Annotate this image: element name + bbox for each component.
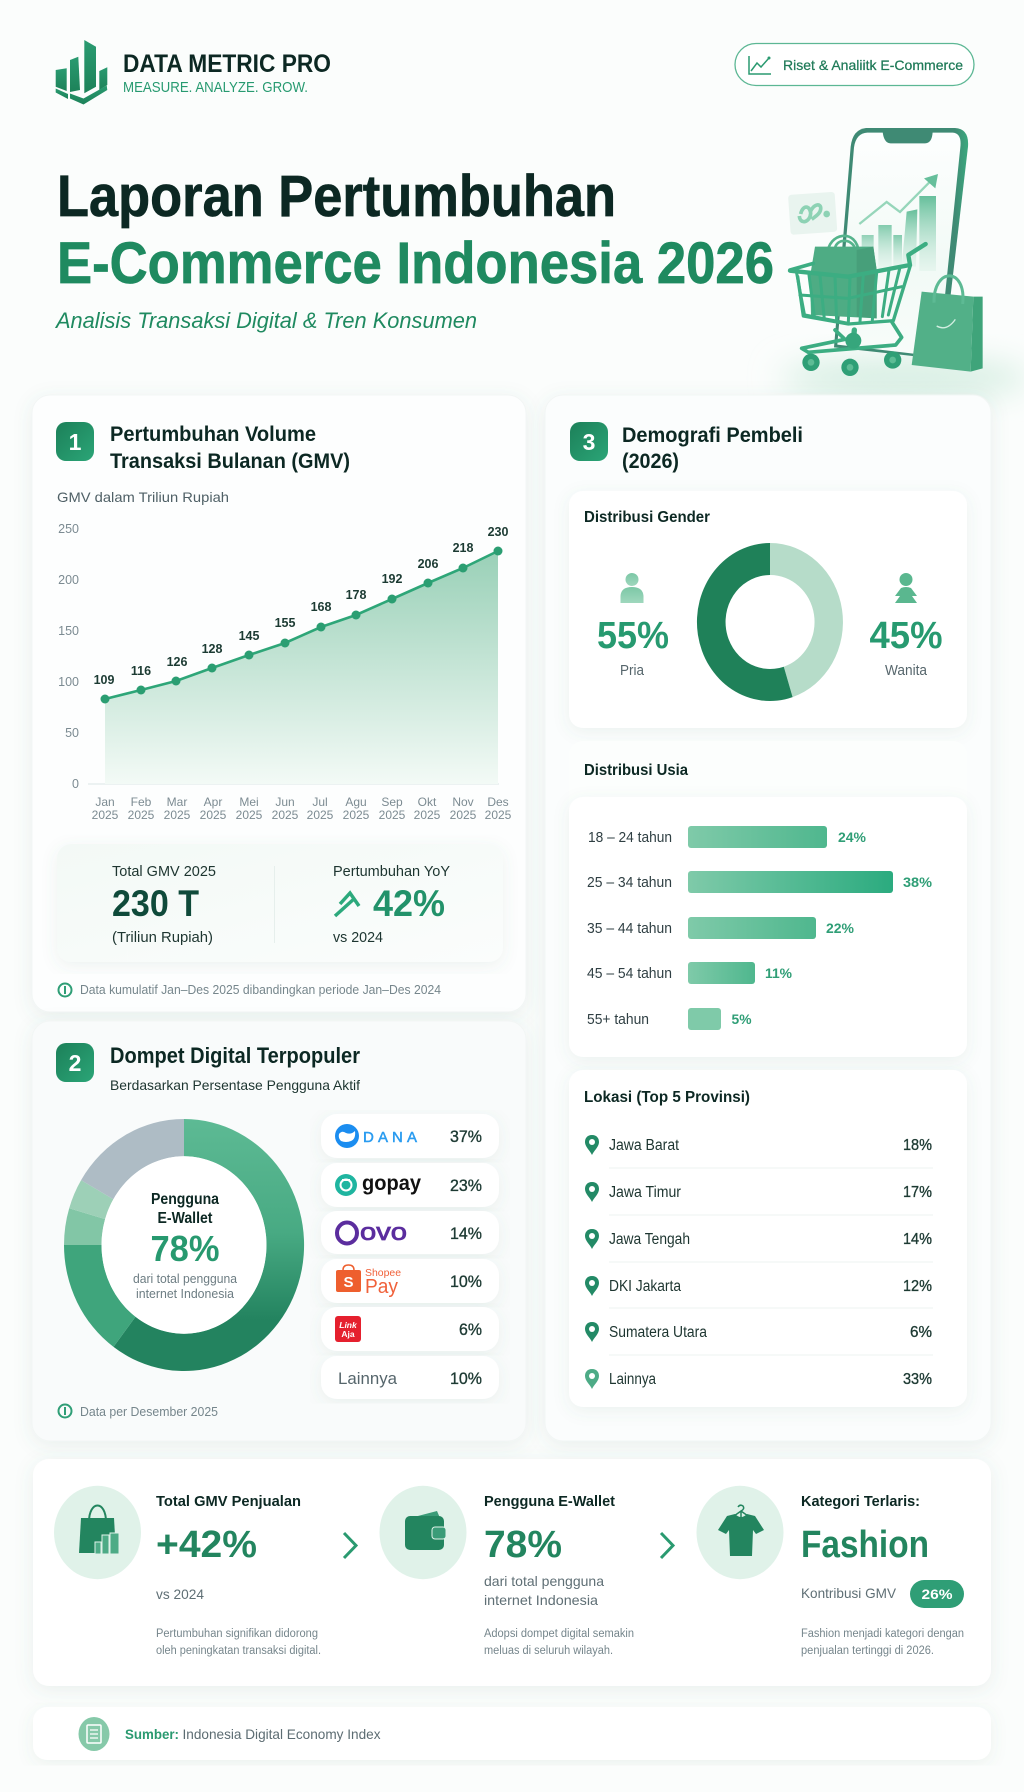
- contribution badge: 26%: [922, 1586, 953, 1602]
- header pill: research label: [735, 44, 974, 86]
- takeaway 3: top category: Fashion: [801, 1524, 929, 1566]
- takeaway 2: e-wallet users: [380, 1486, 634, 1657]
- female share: [870, 615, 942, 679]
- area chart: monthly GMV: 100: [58, 675, 79, 689]
- subtitle: Analisis Transaksi Digital & Tren Konsumen: [54, 308, 477, 333]
- takeaway 3: top category: penjualan tertinggi di 2026.: [801, 1645, 934, 1657]
- illustration: phone and shopping cart: [788, 128, 983, 376]
- row: Jawa Barat: Jawa Barat: [609, 1137, 680, 1154]
- chart subtitle: GMV dalam Triliun Rupiah: [57, 489, 229, 505]
- takeaway 1: total GMV: Total GMV Penjualan: [156, 1493, 301, 1510]
- takeaway 1: total GMV: +42%: [156, 1524, 257, 1566]
- takeaway 1: total GMV: vs 2024: [156, 1586, 204, 1602]
- area chart: monthly GMV: 126: [167, 655, 187, 669]
- bar chart: age groups: 38%: [903, 874, 933, 890]
- area chart: monthly GMV: 0: [72, 777, 79, 791]
- panel heading: [110, 423, 350, 473]
- area chart: monthly GMV: Jun: [275, 795, 295, 809]
- panel heading: Pertumbuhan Volume: [110, 423, 316, 446]
- source bar: Sumber:: [125, 1726, 179, 1742]
- section number 2: 2: [69, 1050, 81, 1076]
- area chart: monthly GMV: Mar: [167, 795, 187, 809]
- area chart: monthly GMV: 2025: [343, 808, 370, 822]
- row: Lainnya: Lainnya: [338, 1369, 398, 1388]
- row: Jawa Tengah: Jawa Tengah: [609, 1231, 690, 1248]
- area chart: monthly GMV: 2025: [128, 808, 155, 822]
- panel subheading: Berdasarkan Persentase Pengguna Aktif: [110, 1077, 360, 1093]
- area chart: monthly GMV: 2025: [485, 808, 512, 822]
- source bar: [33, 1707, 991, 1760]
- cart: [790, 244, 926, 376]
- row: ShopeePay: S: [343, 1274, 354, 1291]
- row: LinkAja: Aja: [341, 1329, 355, 1339]
- summary box: total GMV and YoY: [57, 844, 503, 962]
- icon: document: [78, 1717, 110, 1751]
- takeaway 2: e-wallet users: meluas di seluruh wilayah.: [484, 1645, 613, 1657]
- takeaway 3: top category: [696, 1486, 964, 1657]
- row: Lainnya: 33%: [903, 1371, 932, 1388]
- takeaway 1: total GMV: Pertumbuhan signifikan didorong: [156, 1628, 318, 1640]
- donut center label: internet Indonesia: [136, 1287, 234, 1301]
- panel heading: Demografi Pembeli: [622, 424, 803, 447]
- row: Lainnya: [585, 1369, 932, 1389]
- row: Jawa Barat: 18%: [903, 1137, 932, 1154]
- row: gopay: gopay: [362, 1172, 421, 1195]
- panel heading: (2026): [622, 450, 679, 473]
- bar chart: age groups: 25 – 34 tahun: [587, 875, 672, 891]
- row: ShopeePay: 10%: [450, 1272, 482, 1291]
- takeaway 2: e-wallet users: 78%: [484, 1524, 562, 1566]
- section number 2: [56, 1043, 94, 1082]
- row: DKI Jakarta: 12%: [903, 1278, 932, 1295]
- phone chart arrow: [859, 174, 938, 224]
- summary box: total GMV and YoY: (Triliun Rupiah): [112, 929, 213, 946]
- area chart: monthly GMV: 2025: [272, 808, 299, 822]
- area chart: monthly GMV: 155: [275, 616, 295, 630]
- large shopping bag: [912, 276, 983, 372]
- area chart: monthly GMV: Des: [487, 795, 509, 809]
- floating card: [788, 192, 837, 235]
- donut center label: dari total pengguna: [133, 1272, 237, 1286]
- row: OVO: [321, 1211, 499, 1254]
- row: gopay: [321, 1163, 499, 1207]
- summary box: total GMV and YoY: 230 T: [112, 883, 199, 924]
- bar chart: age groups: 35 – 44 tahun: [587, 921, 672, 937]
- row: DANA: 37%: [450, 1127, 482, 1146]
- icon: shirt on hanger: [696, 1486, 784, 1579]
- row: Jawa Timur: 17%: [903, 1184, 932, 1201]
- cart bag: [810, 236, 877, 318]
- area chart: monthly GMV: 145: [239, 629, 259, 643]
- area chart: monthly GMV: 2025: [450, 808, 477, 822]
- area chart: monthly GMV: 2025: [414, 808, 441, 822]
- area chart: monthly GMV: Agu: [345, 795, 367, 809]
- section number 1: [56, 422, 94, 461]
- takeaway 3: top category: Kontribusi GMV: [801, 1585, 897, 1601]
- icon: female person: [895, 573, 917, 603]
- summary box: total GMV and YoY: Pertumbuhan YoY: [333, 863, 450, 880]
- summary box: total GMV and YoY: vs 2024: [333, 929, 383, 946]
- row: DKI Jakarta: [585, 1276, 932, 1296]
- header pill: research label: Riset & Analiitk E-Commerce: [783, 57, 963, 73]
- section number 3: [570, 422, 608, 461]
- panel: key takeaways: [33, 1459, 991, 1686]
- row: Lainnya: [321, 1356, 499, 1399]
- location card: [569, 1070, 967, 1407]
- bar chart: age groups: 11%: [765, 965, 793, 981]
- area chart: monthly GMV: 109: [94, 673, 114, 687]
- row: OVO: 14%: [450, 1224, 482, 1243]
- data note: Data per Desember 2025: [80, 1405, 218, 1419]
- source bar: Indonesia Digital Economy Index: [182, 1726, 380, 1742]
- panel heading: [622, 424, 803, 473]
- male share: [597, 615, 669, 679]
- row: Sumatera Utara: [585, 1322, 932, 1342]
- takeaway 2: e-wallet users: dari total pengguna: [484, 1573, 604, 1589]
- area chart: monthly GMV: 178: [346, 588, 366, 602]
- phone: [834, 128, 968, 359]
- row: Jawa Tengah: 14%: [903, 1231, 932, 1248]
- row: OVO: ovo: [360, 1219, 407, 1246]
- area chart: monthly GMV: Okt: [418, 795, 437, 809]
- bar chart: age groups: 18 – 24 tahun: [588, 830, 672, 846]
- area chart: monthly GMV: Jan: [95, 795, 115, 809]
- donut chart: gender: [697, 543, 843, 701]
- panel 1: monthly GMV growth: [32, 395, 526, 1012]
- area chart: monthly GMV: Nov: [452, 795, 474, 809]
- bar chart: age groups: [587, 826, 933, 1030]
- bar chart: age groups: 5%: [732, 1011, 752, 1027]
- row: LinkAja: 6%: [459, 1320, 482, 1339]
- takeaway 2: e-wallet users: internet Indonesia: [484, 1592, 598, 1608]
- male share: Pria: [620, 663, 645, 679]
- row: DANA: DANA: [363, 1129, 417, 1146]
- summary box: total GMV and YoY: 42%: [373, 883, 445, 924]
- title: Laporan Pertumbuhan: [57, 164, 616, 229]
- row: ShopeePay: Shopee: [365, 1267, 401, 1279]
- area chart: monthly GMV: 192: [382, 572, 402, 586]
- area chart: monthly GMV: Mei: [239, 795, 259, 809]
- row: Sumatera Utara: Sumatera Utara: [609, 1324, 707, 1341]
- area chart: monthly GMV: Jul: [312, 795, 328, 809]
- row: Jawa Tengah: [585, 1229, 932, 1249]
- takeaway 1: total GMV: oleh peningkatan transaksi digital.: [156, 1645, 321, 1657]
- row: Sumatera Utara: 6%: [910, 1324, 932, 1341]
- area chart: monthly GMV: 116: [131, 664, 151, 678]
- area chart: monthly GMV: 2025: [307, 808, 334, 822]
- header: logo: [56, 40, 107, 104]
- icon: male person: [620, 573, 644, 603]
- takeaway 2: e-wallet users: Pengguna E-Wallet: [484, 1493, 615, 1510]
- area chart: monthly GMV: 168: [311, 600, 331, 614]
- panel 3: buyer demographics: [545, 395, 991, 1441]
- icon: growth arrow: [335, 893, 359, 916]
- gender distribution card: [569, 491, 967, 728]
- age distribution card: [569, 741, 967, 1057]
- area chart: monthly GMV: 218: [453, 541, 473, 555]
- row: Jawa Timur: [585, 1182, 932, 1202]
- section number 3: 3: [583, 429, 595, 455]
- brand name: DATA METRIC PRO: [123, 50, 331, 78]
- gender distribution card: Distribusi Gender: [584, 509, 710, 526]
- row: LinkAja: Link: [339, 1320, 358, 1330]
- row: Jawa Timur: Jawa Timur: [609, 1184, 681, 1201]
- row: Jawa Barat: [585, 1135, 932, 1155]
- donut center label: E-Wallet: [158, 1210, 212, 1227]
- panel heading: Dompet Digital Terpopuler: [110, 1043, 360, 1068]
- icon: shopping bag: [54, 1486, 141, 1579]
- area chart: monthly GMV: 2025: [379, 808, 406, 822]
- age distribution card: Distribusi Usia: [584, 762, 688, 779]
- arrow: [344, 1533, 356, 1558]
- takeaway 3: top category: Fashion menjadi kategori dengan: [801, 1628, 964, 1640]
- area chart: monthly GMV: 2025: [92, 808, 119, 822]
- row: Lainnya: Lainnya: [609, 1371, 656, 1388]
- location card: Lokasi (Top 5 Provinsi): [584, 1089, 750, 1106]
- wallet list: [321, 1114, 499, 1399]
- brand tagline: MEASURE. ANALYZE. GROW.: [123, 79, 308, 96]
- bar chart: age groups: 22%: [826, 920, 855, 936]
- phone chart bars: [862, 196, 936, 271]
- takeaway 1: total GMV: [54, 1486, 321, 1657]
- row: ShopeePay: Pay: [365, 1276, 398, 1298]
- panel 2: digital wallets: [32, 1021, 526, 1441]
- bar chart: age groups: 45 – 54 tahun: [587, 966, 672, 982]
- area chart: monthly GMV: 2025: [164, 808, 191, 822]
- summary box: total GMV and YoY: Total GMV 2025: [112, 863, 216, 880]
- row: DANA: [321, 1114, 499, 1158]
- male share: 55%: [597, 615, 669, 657]
- female share: Wanita: [885, 663, 928, 679]
- title: E-Commerce Indonesia 2026: [57, 231, 774, 296]
- bar chart: age groups: 55+ tahun: [587, 1012, 649, 1028]
- row: gopay: 23%: [450, 1176, 482, 1195]
- area chart: monthly GMV: 250: [58, 522, 79, 536]
- area chart: monthly GMV: Feb: [131, 795, 152, 809]
- area chart: monthly GMV: Apr: [204, 795, 222, 809]
- area chart: monthly GMV: 230: [488, 525, 508, 539]
- area chart: monthly GMV: Sep: [381, 795, 403, 809]
- icon: wallet: [380, 1486, 466, 1579]
- area chart: monthly GMV: 128: [202, 642, 222, 656]
- area chart: monthly GMV: 150: [58, 624, 79, 638]
- female share: 45%: [870, 615, 942, 657]
- row: LinkAja: [321, 1307, 499, 1351]
- donut center label: Pengguna: [151, 1191, 219, 1208]
- takeaway 2: e-wallet users: Adopsi dompet digital semakin: [484, 1628, 634, 1640]
- data note: Data kumulatif Jan–Des 2025 dibandingkan periode Jan–Des 2024: [80, 983, 441, 997]
- bar chart: age groups: 24%: [838, 829, 867, 845]
- section number 1: 1: [69, 429, 82, 455]
- area chart: monthly GMV: 50: [65, 726, 79, 740]
- area chart: monthly GMV: 2025: [236, 808, 263, 822]
- row: ShopeePay: [321, 1259, 499, 1303]
- donut center label: 78%: [150, 1228, 220, 1269]
- row: Lainnya: 10%: [450, 1369, 482, 1388]
- area chart: monthly GMV: 200: [58, 573, 79, 587]
- contribution badge: [910, 1580, 964, 1608]
- donut center label: [133, 1191, 237, 1301]
- row: DKI Jakarta: DKI Jakarta: [609, 1278, 681, 1295]
- area chart: monthly GMV: [58, 522, 512, 822]
- title: [57, 164, 774, 296]
- takeaway 3: top category: Kategori Terlaris:: [801, 1493, 920, 1510]
- area chart: monthly GMV: 2025: [200, 808, 227, 822]
- arrow: [661, 1533, 673, 1558]
- panel heading: Transaksi Bulanan (GMV): [110, 450, 350, 473]
- donut chart: e-wallet share: [64, 1119, 304, 1371]
- area chart: monthly GMV: 206: [418, 557, 438, 571]
